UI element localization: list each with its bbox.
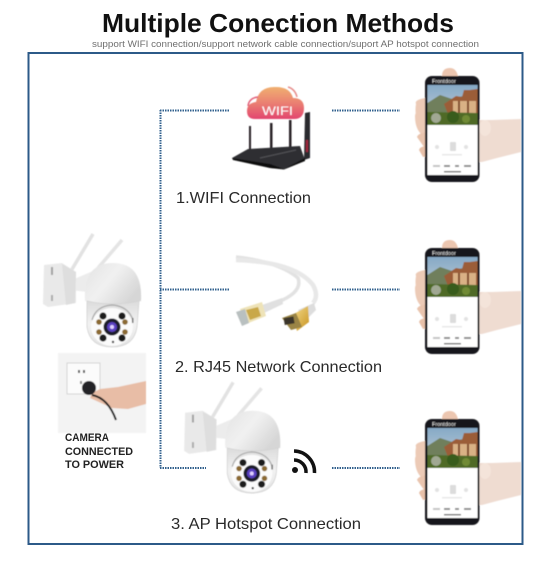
- icon: camera AP hotspot: [184, 382, 280, 493]
- title: Multiple Conection Methods: [102, 8, 454, 38]
- text: camera connected to power: TO POWER: [65, 459, 124, 471]
- icon: camera main: [43, 234, 141, 347]
- connector lines: [160, 110, 400, 468]
- text: camera connected to power: CAMERA: [65, 432, 109, 444]
- icon: plugging camera into power: [58, 353, 146, 433]
- cloud with WIFI: WIFI: [262, 104, 293, 118]
- text: AP hotspot connection: 3. AP Hotspot Connection: [171, 516, 361, 533]
- text: RJ45 connection: 2. RJ45 Network Connection: [175, 359, 382, 376]
- icon: phone 3: [415, 411, 521, 525]
- text: wifi connection: 1.WIFI Connection: [176, 190, 311, 207]
- icon: wifi router: [232, 87, 310, 170]
- text: camera connected to power: [65, 432, 133, 471]
- icon: RJ45 cable: [236, 257, 316, 331]
- panel: frame: [28, 53, 522, 544]
- subtitle: support WIFI connection/support network cable connection/suport AP hotspot connection: [92, 39, 479, 49]
- icon: phone 1: [415, 68, 521, 182]
- icon: wifi signal: [292, 451, 315, 473]
- icon: phone 2: [415, 240, 521, 354]
- text: camera connected to power: CONNECTED: [65, 446, 133, 458]
